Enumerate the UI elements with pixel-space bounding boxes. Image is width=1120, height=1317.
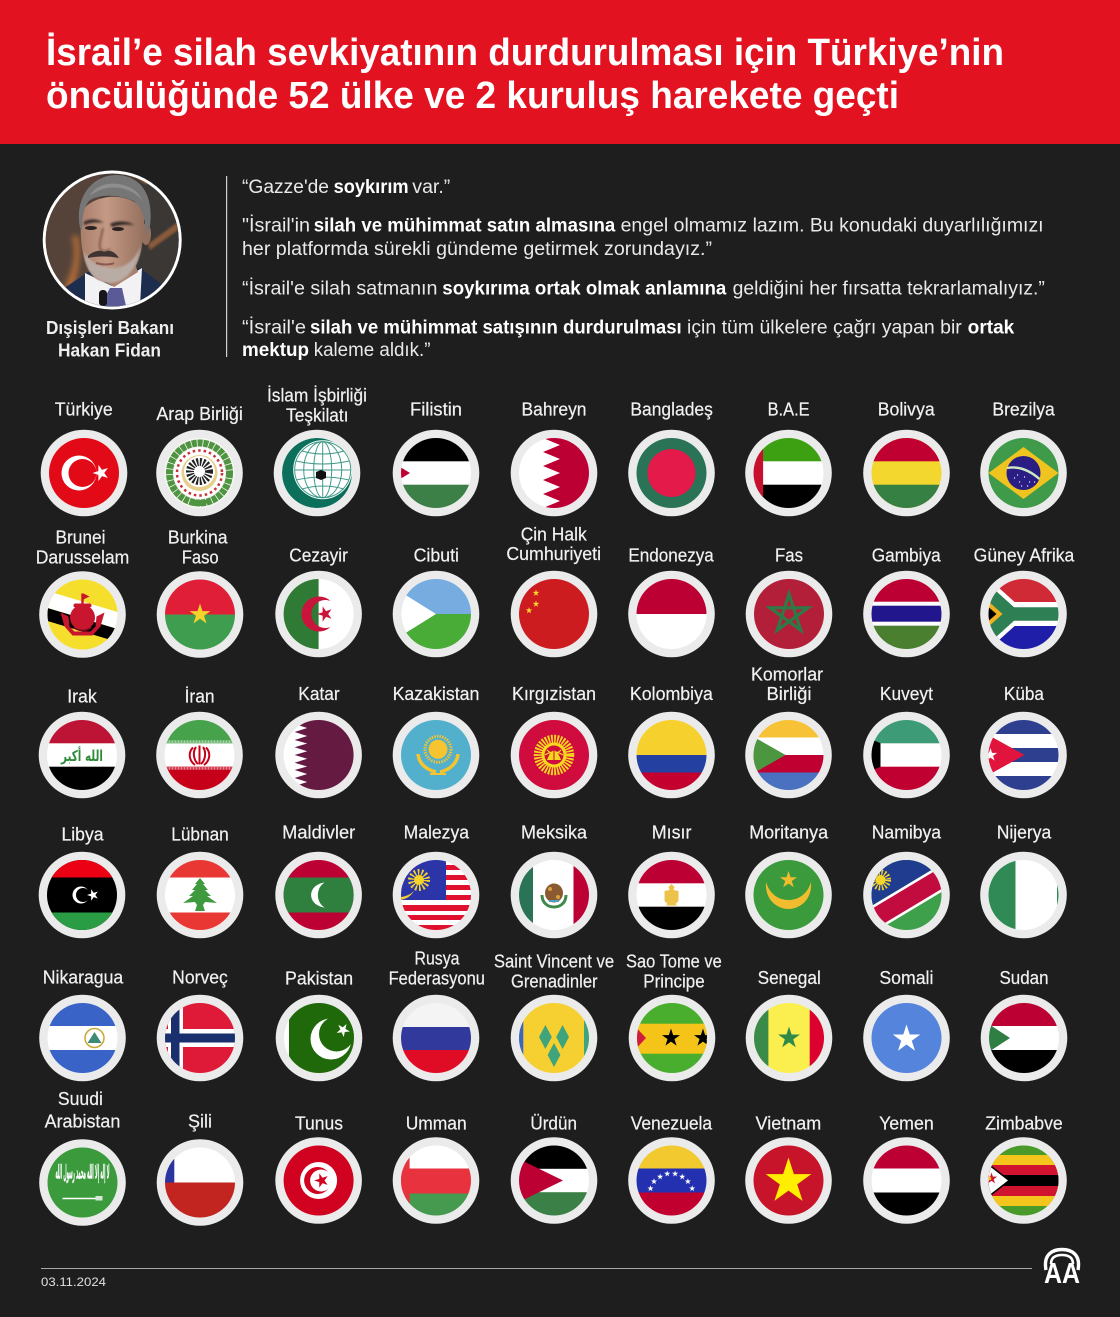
country: Malezya [393, 822, 479, 938]
flag: Brunei [39, 571, 126, 658]
country: Arap Birliği: Arap Birliği [156, 404, 243, 424]
country: Lübnan [157, 824, 243, 938]
flag: Yemen [863, 1137, 950, 1224]
country: Somali [863, 968, 950, 1081]
flag: Kuveyt [863, 712, 950, 798]
country: Brunei Darusselam: Darusselam [36, 548, 129, 568]
country: Kırgızistan: Kırgızistan [512, 684, 596, 704]
country: Kazakistan [393, 684, 479, 798]
flag: Rusya [393, 995, 479, 1081]
flag: Tunus [275, 1137, 362, 1224]
quote block [242, 177, 1045, 361]
country: Umman [393, 1113, 479, 1224]
country grid: لا إله إلا الله محمد رسول الله [56, 1162, 110, 1184]
country: Tunus: Tunus [295, 1113, 343, 1133]
flag: Cibuti [392, 570, 480, 658]
country: Zimbabve [980, 1113, 1067, 1224]
caption: minister name: Dışişleri Bakanı [46, 318, 174, 338]
country: Namibya: Namibya [872, 822, 942, 842]
flag: Brezilya [980, 430, 1067, 516]
flag: Somali [863, 995, 950, 1081]
flag: Burkina Faso [157, 571, 243, 658]
country: B.A.E [745, 400, 832, 516]
country: Komorlar Birliği: Birliği [766, 684, 812, 704]
quote 2: engel olmamız lazım. Bu konudaki duyarlılığımızı [621, 216, 1044, 237]
flag: Gambiya [863, 571, 950, 657]
country: Katar: Katar [298, 684, 340, 704]
country: Gambiya [863, 546, 950, 657]
title: İsrail’e silah sevkiyatının durdurulması için Türkiye’nin [46, 32, 1004, 74]
country: İran [156, 687, 243, 798]
country: Senegal [746, 968, 832, 1081]
country: Nijerya [980, 822, 1067, 938]
country: Şili [157, 1111, 243, 1226]
country: Sao Tome ve Principe: Principe [643, 971, 705, 991]
country: Küba [980, 684, 1067, 798]
country: Burkina Faso [157, 528, 243, 658]
flag: Venezuela [628, 1137, 715, 1224]
flag: Mısır [628, 852, 715, 938]
country: Saint Vincent ve Grenadinler [494, 952, 614, 1081]
flag: Bangladeş [628, 430, 715, 516]
emblem: Arap Birliği [156, 430, 243, 516]
flag: Senegal [746, 995, 832, 1081]
flag: Türkiye [41, 430, 127, 516]
country: Nikaragua: Nikaragua [43, 968, 124, 988]
country: Somali: Somali [879, 968, 933, 988]
country: Pakistan: Pakistan [285, 969, 353, 989]
country: Mısır [628, 822, 715, 938]
quote 3: geldiğini her fırsatta tekrarlamalıyız.” [733, 278, 1045, 299]
country: Norveç [157, 968, 243, 1081]
quote 4: silah ve mühimmat satışının durdurulması [310, 317, 682, 338]
country: Çin Halk Cumhuriyeti: Çin Halk [521, 525, 588, 545]
title: öncülüğünde 52 ülke ve 2 kuruluş harekete geçti [46, 75, 899, 117]
country: Kuveyt: Kuveyt [880, 684, 933, 704]
country: Kuveyt [863, 684, 950, 798]
quote 1: soykırım [334, 177, 409, 198]
quote 3: “İsrail'e silah satmanın [242, 278, 438, 299]
country: Rusya Federasyonu: Federasyonu [389, 969, 485, 989]
quote 4: “İsrail'e [242, 317, 306, 338]
logo: AA: AA [1044, 1258, 1080, 1290]
flag: Pakistan [276, 995, 362, 1081]
flag: Endonezya [628, 571, 715, 657]
country: Sao Tome ve Principe: Sao Tome ve [626, 952, 722, 972]
country: Nijerya: Nijerya [997, 822, 1052, 842]
caption: minister name [46, 318, 174, 360]
country: Çin Halk Cumhuriyeti: Cumhuriyeti [506, 544, 601, 564]
flag: Sudan [981, 995, 1067, 1081]
flag: Umman [393, 1137, 479, 1224]
flag: Cezayir [275, 571, 362, 657]
country: Sao Tome ve Principe [626, 952, 722, 1081]
flag: Küba [980, 712, 1067, 798]
country: B.A.E: B.A.E [768, 400, 810, 420]
country: Umman: Umman [406, 1113, 467, 1133]
country: Yemen [863, 1113, 950, 1224]
country: Güney Afrika: Güney Afrika [974, 546, 1075, 566]
country: Brezilya: Brezilya [992, 400, 1056, 420]
quote 4: için tüm ülkelere çağrı yapan bir [687, 317, 962, 338]
quote 4: kaleme aldık.” [314, 340, 430, 361]
country: Suudi Arabistan: Arabistan [45, 1111, 120, 1131]
country: Cibuti: Cibuti [414, 546, 459, 566]
country: Lübnan: Lübnan [171, 824, 229, 844]
country: Bahreyn: Bahreyn [522, 400, 586, 420]
country: Filistin [393, 400, 479, 516]
country: Maldivler [275, 822, 362, 938]
country: Katar [275, 684, 362, 798]
country: Bangladeş [628, 400, 715, 516]
quote 2 [242, 216, 1044, 260]
country: Gambiya: Gambiya [872, 546, 942, 566]
country: Endonezya: Endonezya [628, 546, 715, 566]
flag: Güney Afrika [980, 571, 1067, 657]
country: Fas [746, 546, 832, 657]
country: Tunus [275, 1113, 362, 1224]
flag: Irak: الله أكبر [60, 746, 103, 765]
flag: Kolombiya [628, 712, 715, 798]
country: Bolivya [863, 400, 950, 516]
flag: Libya [39, 852, 125, 938]
country: Cezayir [275, 546, 362, 657]
flag: Bahreyn [511, 430, 597, 516]
country: Norveç: Norveç [172, 968, 228, 988]
portrait: Hakan Fidan [40, 170, 185, 312]
flag: Sao Tome [629, 995, 715, 1081]
flag: Fas [746, 571, 832, 657]
quote 4: mektup [242, 340, 309, 361]
country: Filistin: Filistin [410, 400, 462, 420]
country: Irak: Irak [67, 687, 98, 707]
title [46, 32, 1004, 117]
country: Bangladeş: Bangladeş [630, 400, 713, 420]
flag: B.A.E [745, 430, 832, 516]
country: Saint Vincent ve Grenadinler: Grenadinler [511, 971, 598, 991]
flag: Norveç [157, 995, 243, 1081]
country: Irak [39, 687, 125, 798]
country: Namibya [863, 822, 950, 938]
country: Cezayir: Cezayir [289, 546, 348, 566]
country: İslam İşbirliği Teşkilatı: İslam İşbirliği [267, 386, 367, 406]
country: Vietnam: Vietnam [756, 1113, 821, 1133]
flag: Nikaragua [39, 995, 126, 1081]
flag: Maldivler [275, 852, 362, 938]
country: Komorlar Birliği: Komorlar [751, 665, 823, 685]
country: Kazakistan: Kazakistan [393, 684, 479, 704]
flag: Moritanya [745, 852, 832, 938]
country: Türkiye [41, 400, 127, 516]
country: Brunei Darusselam [36, 528, 129, 658]
country: Burkina Faso: Burkina [168, 528, 228, 548]
country: Cibuti [392, 548, 480, 658]
flag: Kırgızistan [511, 712, 597, 798]
flag: Şili [157, 1139, 243, 1226]
country: Endonezya [628, 546, 715, 657]
flag: Kazakistan [393, 712, 479, 798]
country: Vietnam [745, 1113, 832, 1224]
quote 3: soykırıma ortak olmak anlamına [442, 278, 727, 299]
quote 2: silah ve mühimmat satın almasına [314, 216, 616, 237]
flag: Filistin [393, 430, 479, 516]
country: Suudi Arabistan: Suudi [58, 1089, 103, 1109]
flag: Vietnam [745, 1137, 832, 1224]
country: Maldivler: Maldivler [282, 822, 355, 842]
country: Fas: Fas [775, 546, 803, 566]
country: Moritanya [745, 822, 832, 938]
quote 1: var.” [412, 177, 450, 198]
country: Kolombiya: Kolombiya [630, 684, 714, 704]
country: Arap Birliği [156, 404, 243, 516]
flag: Saint Vincent [511, 995, 597, 1081]
country: Kolombiya [628, 684, 715, 798]
country: Libya [39, 824, 125, 938]
header banner [0, 0, 1120, 144]
country: Bahreyn [511, 400, 597, 516]
country: Bolivya: Bolivya [878, 400, 936, 420]
country: İran: İran [185, 687, 215, 707]
emblem: İslam İşbirliği Teşkilatı [274, 430, 360, 516]
country: Rusya Federasyonu: Rusya [414, 949, 460, 969]
country: Meksika: Meksika [521, 822, 588, 842]
country: Malezya: Malezya [404, 822, 470, 842]
date: 03.11.2024 [41, 1275, 106, 1289]
quote 2: her platformda sürekli gündeme getirmek zorundayız.” [242, 239, 712, 260]
country: Zimbabve: Zimbabve [985, 1113, 1063, 1133]
quote 1 [242, 177, 450, 198]
country: Küba: Küba [1004, 684, 1045, 704]
caption: minister name: Hakan Fidan [58, 340, 161, 360]
flag: İran [156, 712, 243, 798]
country: Senegal: Senegal [758, 968, 821, 988]
country: Pakistan [276, 969, 362, 1081]
country: Çin Halk Cumhuriyeti [506, 525, 601, 657]
quote 1: “Gazze'de [242, 177, 329, 198]
quote 2: "İsrail'in [242, 216, 310, 237]
country: Meksika [511, 822, 597, 938]
country: Şili: Şili [188, 1111, 212, 1131]
country grid [36, 386, 1075, 1226]
quote 4 [242, 317, 1015, 361]
flag: Malezya [393, 852, 479, 938]
country: Türkiye: Türkiye [55, 400, 113, 420]
country: Kırgızistan [511, 684, 597, 798]
country: Ürdün: Ürdün [530, 1113, 577, 1133]
country: Rusya Federasyonu [389, 949, 485, 1081]
country: Sudan: Sudan [1000, 968, 1048, 988]
flag: Çin [511, 571, 597, 657]
country: Komorlar Birliği [745, 665, 832, 798]
country: Saint Vincent ve Grenadinler: Saint Vincent ve [494, 952, 614, 972]
flag: Ürdün [511, 1137, 597, 1224]
flag: Meksika [511, 852, 597, 938]
flag: Namibya [863, 852, 950, 938]
quote 4: ortak [968, 317, 1015, 338]
flag: Katar [275, 712, 362, 798]
country: Ürdün [511, 1113, 597, 1224]
country: Sudan [981, 968, 1067, 1081]
country: Burkina Faso: Faso [182, 548, 219, 568]
country: İslam İşbirliği Teşkilatı [267, 386, 367, 516]
country: Suudi Arabistan [39, 1089, 126, 1226]
quote 3 [242, 278, 1045, 299]
flag: Bolivya [863, 430, 950, 516]
country: Brunei Darusselam: Brunei [56, 528, 106, 548]
country: İslam İşbirliği Teşkilatı: Teşkilatı [286, 406, 349, 426]
country: Mısır: Mısır [652, 822, 691, 842]
country: Güney Afrika [974, 546, 1075, 657]
flag: Lübnan [157, 852, 243, 938]
country: Brezilya [980, 400, 1067, 516]
country: Venezuela [628, 1113, 715, 1224]
flag: Komorlar [745, 712, 832, 798]
country: Yemen: Yemen [879, 1113, 934, 1133]
country: Libya: Libya [62, 824, 104, 844]
country: Nikaragua [39, 968, 126, 1081]
country: Venezuela: Venezuela [631, 1113, 713, 1133]
flag: Nijerya [980, 852, 1067, 938]
flag: Zimbabve [980, 1137, 1067, 1224]
country: Moritanya: Moritanya [749, 822, 829, 842]
